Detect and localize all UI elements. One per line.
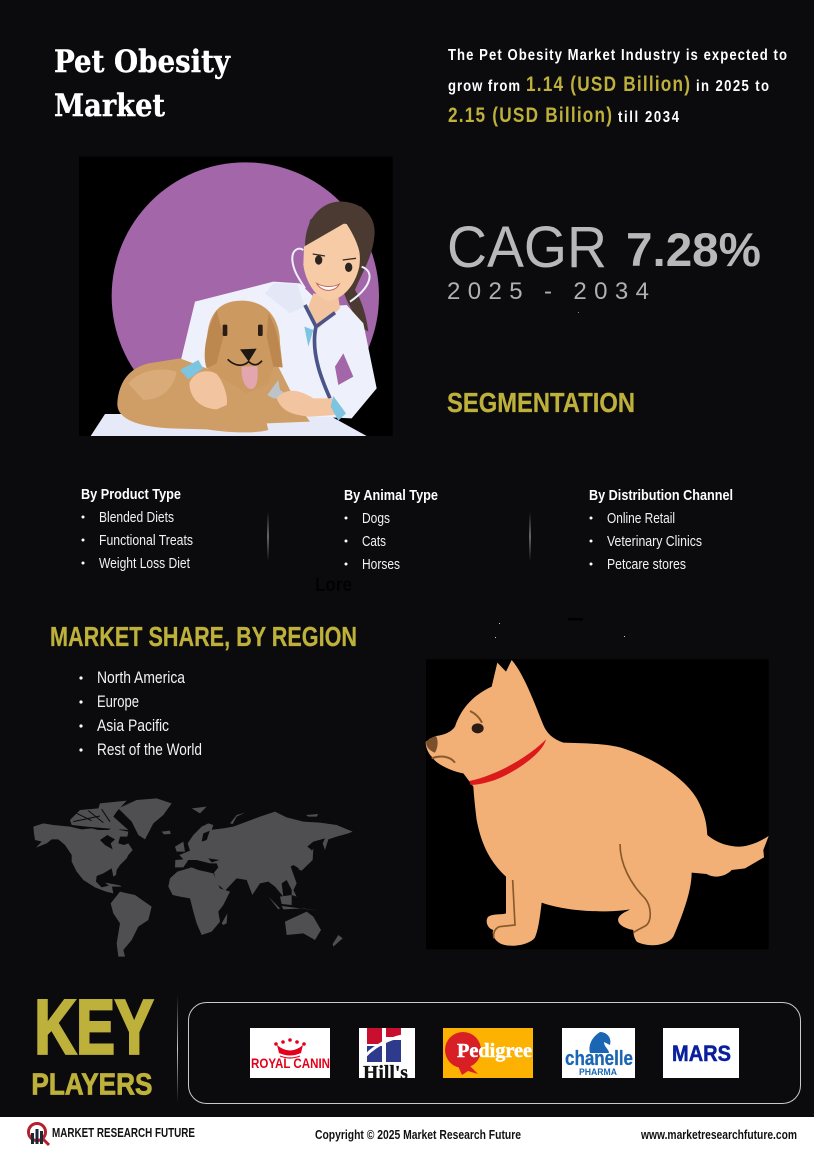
footer bar bbox=[0, 1117, 814, 1150]
segment: by distribution channel: Online Retail bbox=[607, 510, 675, 527]
logo: Hill's: Hill's bbox=[363, 1062, 408, 1084]
title bbox=[54, 44, 231, 124]
illustration: vet with dog bbox=[79, 157, 393, 436]
segment: by distribution channel: Petcare stores bbox=[607, 556, 686, 573]
heading: segmentation: SEGMENTATION bbox=[447, 387, 635, 418]
market forecast text: 2.15 (USD Billion) bbox=[448, 105, 612, 127]
segment: by animal type: Horses bbox=[362, 556, 400, 573]
logo: Hill's bbox=[359, 1028, 415, 1078]
logo: Mars: MARS bbox=[672, 1041, 731, 1066]
market forecast text: in 2025 to bbox=[696, 78, 769, 95]
world map bbox=[33, 798, 353, 957]
logo: Royal Canin bbox=[250, 1028, 330, 1078]
logo: Chanelle Pharma: chanelle bbox=[565, 1048, 633, 1070]
segment: by animal type bbox=[344, 487, 438, 573]
footer: brand name: MARKET RESEARCH FUTURE bbox=[52, 1125, 195, 1140]
heading: key players bbox=[31, 984, 153, 1102]
segment: by product type bbox=[81, 486, 193, 572]
logo: Royal Canin: ROYAL CANIN bbox=[251, 1055, 330, 1071]
market forecast text: The Pet Obesity Market Industry is expected to bbox=[448, 47, 787, 64]
region list: Rest of the World bbox=[97, 741, 202, 759]
region list: North America bbox=[97, 669, 186, 687]
market forecast text: till 2034 bbox=[618, 109, 680, 126]
segment: by animal type: By Animal Type bbox=[344, 487, 438, 504]
segment: by animal type: Cats bbox=[362, 533, 386, 550]
segment: by distribution channel: Veterinary Clinics bbox=[607, 533, 702, 550]
region list bbox=[79, 669, 202, 759]
segment: by animal type: Dogs bbox=[362, 510, 390, 527]
logo: Pedigree: Pedigree bbox=[457, 1040, 532, 1062]
panel: key players logos bbox=[188, 1002, 800, 1104]
segment: by product type: Weight Loss Diet bbox=[99, 555, 191, 572]
CAGR figure bbox=[447, 215, 761, 305]
faint leftover text: Lore bbox=[315, 575, 352, 596]
title: Pet Obesity bbox=[54, 44, 231, 80]
segment: by product type: Functional Treats bbox=[99, 532, 193, 549]
market forecast text: grow from bbox=[448, 78, 520, 95]
region list: Asia Pacific bbox=[97, 717, 169, 735]
illustration: overweight dog bbox=[426, 659, 769, 949]
heading: key players: KEY bbox=[34, 984, 154, 1070]
logo: Chanelle Pharma: PHARMA bbox=[579, 1067, 617, 1077]
segment: by distribution channel bbox=[589, 487, 733, 573]
segment: by product type: By Product Type bbox=[81, 486, 181, 503]
heading: key players: PLAYERS bbox=[31, 1068, 152, 1102]
CAGR figure: 7.28% bbox=[626, 223, 761, 276]
logo: Mars bbox=[663, 1028, 739, 1078]
market forecast text: 1.14 (USD Billion) bbox=[526, 74, 690, 96]
logo: Chanelle Pharma bbox=[562, 1028, 635, 1078]
CAGR figure: 2025 - 2034 bbox=[447, 278, 649, 305]
title: Market bbox=[54, 88, 166, 124]
region list: Europe bbox=[97, 693, 139, 711]
CAGR figure: CAGR bbox=[447, 215, 607, 280]
icon: market research future bbox=[28, 1124, 49, 1145]
footer: copyright: Copyright © 2025 Market Research Future bbox=[315, 1127, 521, 1142]
segment: by product type: Blended Diets bbox=[99, 509, 174, 526]
logo: Pedigree bbox=[443, 1028, 533, 1078]
market forecast text bbox=[448, 47, 787, 127]
segment: by distribution channel: By Distribution Channel bbox=[589, 487, 733, 504]
heading: market share by region: MARKET SHARE, BY REGION bbox=[50, 621, 357, 652]
